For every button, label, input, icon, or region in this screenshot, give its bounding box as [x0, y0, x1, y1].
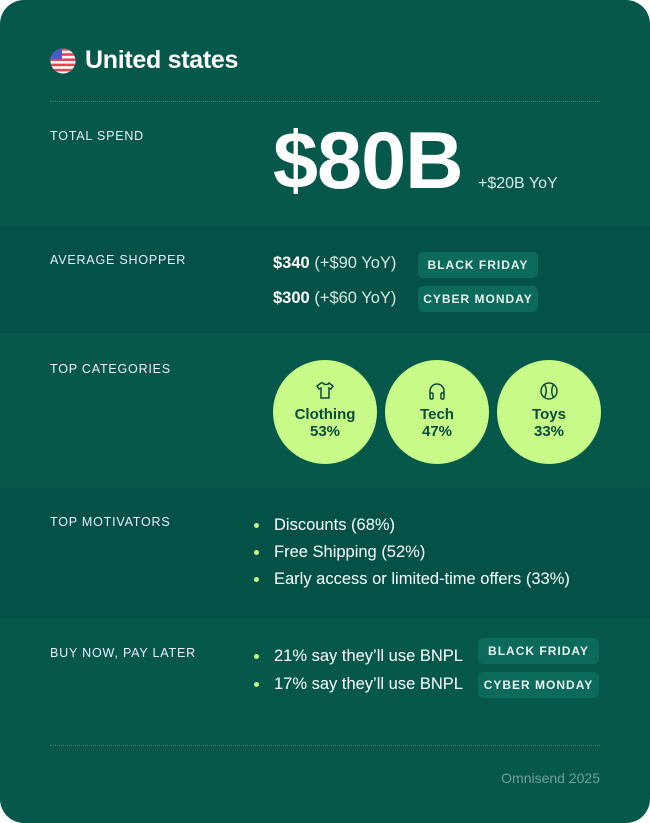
average shopper: AVERAGE SHOPPER — [50, 253, 186, 267]
card: CYBER MONDAY — [484, 678, 593, 692]
card: Early access or limited-time offers (33%) — [274, 570, 570, 588]
card: $300 (+$60 YoY) — [273, 289, 396, 307]
title: United states — [85, 46, 238, 74]
circle: tech — [385, 360, 489, 464]
card: Discounts (68%) — [274, 516, 395, 534]
circle: tech: Tech — [420, 406, 454, 423]
card: +$20B YoY — [478, 175, 558, 192]
top categories: TOP CATEGORIES — [50, 362, 171, 376]
card: CYBER MONDAY — [423, 292, 533, 306]
total spend: TOTAL SPEND — [50, 129, 144, 143]
card: 17% say they’ll use BNPL — [274, 675, 463, 693]
footer: Omnisend 2025 — [501, 770, 600, 786]
card: $340 (+$90 YoY) — [273, 254, 396, 272]
circle: clothing — [273, 360, 377, 464]
top motivators: TOP MOTIVATORS — [50, 515, 170, 529]
BNPL: BUY NOW, PAY LATER — [50, 646, 196, 660]
card: $80B — [273, 116, 463, 206]
card: 21% say they’ll use BNPL — [274, 647, 463, 665]
circle: clothing: 53% — [310, 423, 340, 440]
icon: US flag — [50, 48, 76, 74]
card: BLACK FRIDAY — [428, 258, 528, 272]
circle: clothing: Clothing — [295, 406, 355, 423]
card: BLACK FRIDAY — [488, 644, 589, 658]
circle: toys: Toys — [532, 406, 566, 423]
circle: toys: 33% — [534, 423, 564, 440]
circle: toys — [497, 360, 601, 464]
card: Free Shipping (52%) — [274, 543, 425, 561]
circle: tech: 47% — [422, 423, 452, 440]
